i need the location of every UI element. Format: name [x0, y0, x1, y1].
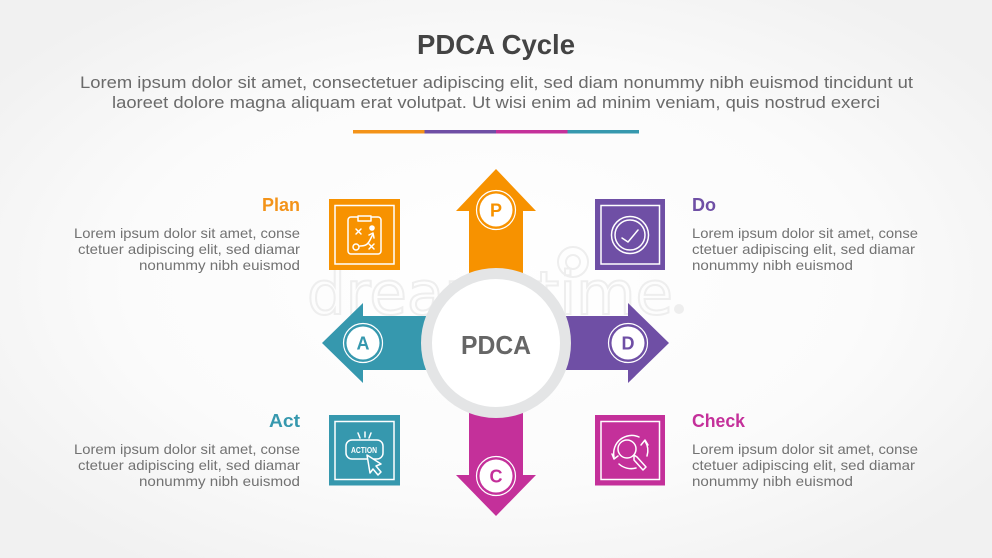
icon: act button: ACTION: [351, 445, 377, 455]
arrow: check (down): C: [490, 466, 502, 486]
text block: check: Check: [692, 411, 746, 431]
arrow: act (left): [322, 303, 430, 383]
text block: plan: ctetuer adipiscing elit, sed diamar: [78, 241, 300, 257]
four-colour divider: [353, 130, 639, 134]
arrow: plan (up): [456, 169, 536, 280]
arrow: do (right): D: [622, 334, 634, 354]
arrow: do (right): [560, 303, 669, 383]
text block: plan: Plan: [262, 195, 300, 215]
text block: do: Do: [692, 195, 716, 215]
text block: act: Lorem ipsum dolor sit amet, conse: [74, 441, 300, 457]
text block: act: nonummy nibh euismod: [139, 473, 300, 489]
watermark: dreamstime: [307, 259, 673, 329]
text block: act: [74, 411, 300, 489]
icon: act button: [329, 415, 400, 486]
icon: plan clipboard: [329, 199, 400, 270]
text block: plan: Lorem ipsum dolor sit amet, conse: [74, 225, 300, 241]
text block: do: ctetuer adipiscing elit, sed diamar: [692, 241, 915, 257]
text block: check: Lorem ipsum dolor sit amet, conse: [692, 441, 918, 457]
subtitle text: Lorem ipsum dolor sit amet, consectetuer adipiscing elit, sed diam nonummy nibh euismod tincidunt ut: [80, 73, 913, 92]
text block: check: [692, 411, 918, 489]
text block: plan: nonummy nibh euismod: [139, 257, 300, 273]
text block: plan: [74, 195, 300, 273]
text block: do: Lorem ipsum dolor sit amet, conse: [692, 225, 918, 241]
text block: check: ctetuer adipiscing elit, sed diamar: [692, 457, 915, 473]
text block: check: nonummy nibh euismod: [692, 473, 853, 489]
arrow: act (left): A: [356, 334, 370, 354]
text block: act: ctetuer adipiscing elit, sed diamar: [78, 457, 300, 473]
arrow: plan (up): P: [490, 200, 502, 220]
arrow: check (down): [456, 410, 536, 516]
icon: check magnifier: [595, 415, 665, 486]
subtitle text: [80, 73, 913, 112]
text block: do: [692, 195, 918, 273]
centre circle: PDCA: [461, 330, 531, 360]
text block: act: Act: [269, 411, 300, 431]
text block: do: nonummy nibh euismod: [692, 257, 853, 273]
title: PDCA Cycle: [417, 29, 575, 60]
subtitle text: laoreet dolore magna aliquam erat volutpat. Ut wisi enim ad minim veniam, quis nostrud exerci: [112, 93, 880, 112]
icon: do checkmark: [595, 199, 665, 270]
centre circle: [426, 274, 566, 412]
